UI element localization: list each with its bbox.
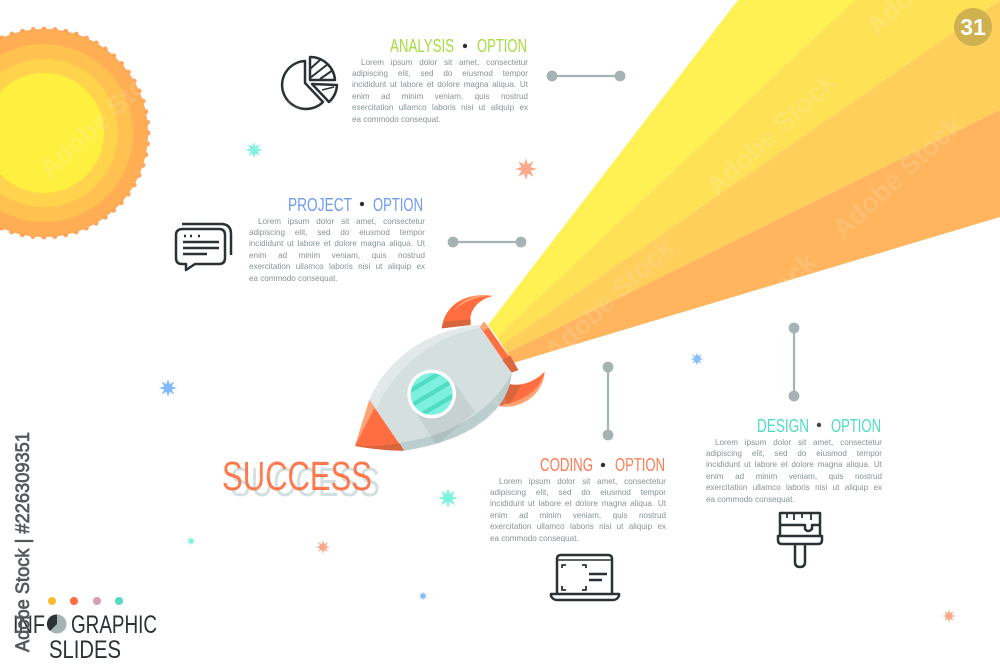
heading: coding option (540, 455, 665, 475)
text block: project: Lorem ipsum dolor sit amet, consectetur (258, 216, 425, 226)
text block: project: incididunt ut labore et dolore magna aliqua. Ut (249, 239, 425, 248)
watermarks: Adobe Stock (681, 246, 822, 381)
text block: project: adipiscing elit, sed do eiusmod tempor (249, 228, 425, 237)
logo: infographic slides (13, 597, 157, 664)
text block: coding: exercitation ullamco laboris nisi ut aliquip ex (490, 522, 666, 531)
heading: design option (757, 416, 881, 436)
heading: analysis option (390, 36, 527, 56)
watermarks: Adobe Stock (492, 99, 633, 234)
icon: paint brush (778, 513, 822, 567)
icon: pie chart (282, 57, 337, 109)
watermarks: Adobe Stock (364, 44, 505, 179)
watermarks: Adobe Stock (504, 439, 645, 574)
icon: laptop (551, 555, 619, 600)
logo: infographic slides: INF (13, 611, 45, 639)
text block: coding: incididunt ut labore et dolore magna aliqua. Ut (490, 499, 666, 508)
text block: coding (490, 476, 666, 543)
watermarks: Adobe Stock (224, 529, 365, 664)
connector: design (789, 323, 799, 401)
watermarks: Adobe Stock (334, 259, 475, 394)
text block: coding: enim ad minim veniam, quis nostrud (490, 511, 666, 520)
text block: design (706, 438, 882, 504)
watermarks: Adobe Stock (34, 49, 175, 184)
text block: analysis: adipiscing elit, sed do eiusmod tempor (352, 69, 528, 78)
text block: analysis (352, 58, 528, 124)
text block: project: ea commodo consequat. (249, 274, 338, 283)
success shadow label: SUCCESS (230, 459, 380, 505)
text block: coding: adipiscing elit, sed do eiusmod tempor (490, 488, 666, 497)
connector: coding (603, 362, 613, 440)
watermarks: Adobe Stock (539, 231, 680, 366)
watermarks: Adobe Stock (834, 444, 975, 579)
hull (369, 325, 512, 451)
text block: design: adipiscing elit, sed do eiusmod tempor (706, 449, 882, 458)
sun (0, 29, 148, 237)
text block: design: ea commodo consequat. (706, 495, 795, 504)
heading: analysis option: OPTION (477, 36, 527, 56)
text block: design: enim ad minim veniam, quis nostrud (706, 472, 882, 481)
heading: project option: PROJECT (288, 195, 352, 215)
text block: design: Lorem ipsum dolor sit amet, consectetur (715, 438, 882, 446)
text block: project (249, 216, 425, 283)
text block: analysis: ea commodo consequat. (352, 115, 441, 124)
watermarks: Adobe Stock (709, 399, 850, 534)
watermarks: Adobe Stock (554, 534, 695, 667)
text block: analysis: exercitation ullamco laboris nisi ut aliquip ex (352, 103, 528, 112)
heading: coding option: OPTION (615, 455, 665, 475)
connector: analysis (547, 71, 625, 81)
stars (159, 142, 956, 622)
text block: coding: ea commodo consequat. (490, 534, 579, 543)
text block: design: exercitation ullamco laboris nisi ut aliquip ex (706, 483, 882, 492)
text block: project: exercitation ullamco laboris nisi ut aliquip ex (249, 262, 425, 271)
watermarks: Adobe Stock (44, 384, 185, 519)
watermarks: Adobe Stock (4, 254, 145, 389)
heading: project option: OPTION (373, 195, 423, 215)
watermarks: Adobe Stock (164, 89, 305, 224)
icon: chat bubbles (176, 224, 231, 270)
page number badge: 31 (960, 14, 986, 40)
watermarks: Adobe Stock (701, 66, 842, 201)
porthole (407, 370, 456, 418)
engine ring (480, 322, 518, 373)
text block: analysis: enim ad minim veniam, quis nostrud (352, 92, 528, 101)
heading: coding option: CODING (540, 455, 593, 475)
logo: infographic slides: SLIDES (49, 636, 121, 664)
heading: design option: OPTION (831, 416, 881, 436)
watermarks: Adobe Stock (744, 534, 885, 667)
text block: coding: Lorem ipsum dolor sit amet, consectetur (499, 476, 666, 486)
watermarks: Adobe Stock (174, 424, 315, 559)
top fin (442, 295, 493, 328)
rocket (355, 295, 545, 451)
nose cone (355, 400, 404, 451)
heading: analysis option: ANALYSIS (390, 36, 454, 56)
heading: design option: DESIGN (757, 416, 809, 436)
text block: analysis: incididunt ut labore et dolore magna aliqua. Ut (352, 80, 528, 89)
page number badge (954, 8, 992, 46)
text block: design: incididunt ut labore et dolore magna aliqua. Ut (706, 460, 882, 469)
watermarks: Adobe Stock (827, 109, 968, 244)
text block: project: enim ad minim veniam, quis nostrud (249, 251, 425, 260)
watermarks: Adobe Stock (204, 219, 345, 354)
connector: project (448, 237, 526, 247)
stock id vertical text: Adobe Stock | #226309351 (13, 432, 34, 652)
text block: analysis: Lorem ipsum dolor sit amet, consectetur (361, 58, 528, 66)
bottom fin (497, 372, 545, 407)
heading: project option (288, 195, 423, 215)
success label: SUCCESS (222, 453, 372, 499)
watermarks: Adobe Stock (379, 389, 520, 524)
rocket exhaust beam (488, 0, 1000, 363)
logo: infographic slides: GRAPHIC (71, 611, 157, 639)
